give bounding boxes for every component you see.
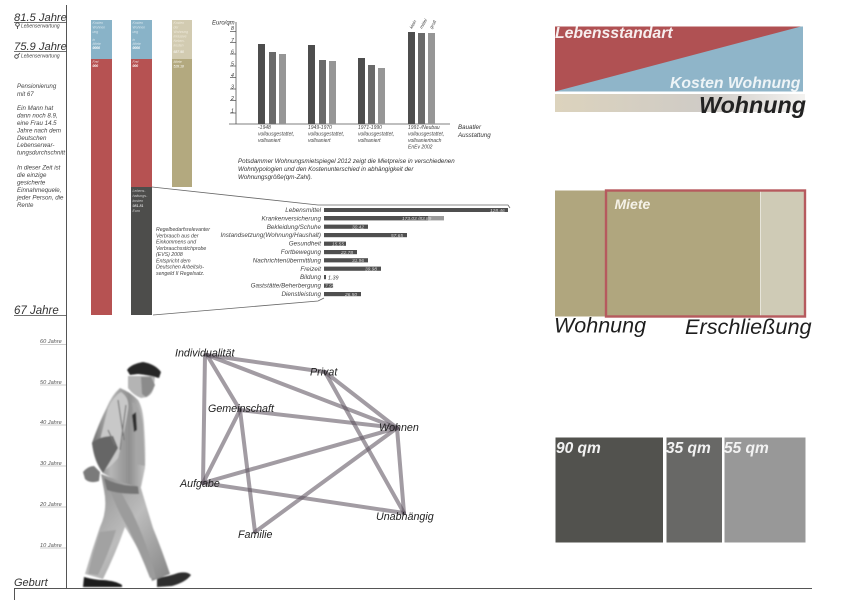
income bar 2: in [132, 38, 135, 42]
rent bar chart: 4 [231, 73, 234, 79]
age scale: 50 Jahre [40, 380, 62, 386]
life expectancy labels: Lebenserwartung [21, 24, 60, 30]
spending bars: Lebensmittel [285, 207, 322, 214]
income bar 2: Lebens- [132, 189, 146, 193]
standard rate text: (EVS) 2008 [156, 252, 183, 258]
income bar 1: 000 [92, 64, 98, 68]
spending bars: Bildung [300, 274, 321, 281]
spending bars: 7.95 [325, 284, 335, 290]
network edges [203, 355, 404, 532]
network labels: Unabhängig [376, 511, 434, 523]
panel: Miete: Miete [614, 196, 650, 212]
rent bar chart: 1971-1990 [358, 125, 382, 131]
rent bar chart: vollsaniert [258, 138, 281, 144]
spending bars: 1.39 [328, 276, 338, 282]
panel: apartment sizes [556, 438, 806, 542]
panel: Lebensstandart vs housing cost: Wohnung [699, 92, 806, 118]
age scale: 20 Jahre [39, 502, 62, 508]
life expectancy labels: 67 Jahre [14, 305, 59, 317]
retirement text: Rente [17, 202, 34, 209]
income bar 2: kosten [132, 199, 143, 203]
rent bar chart: Bauatler [458, 124, 482, 131]
front shoe [157, 572, 191, 587]
income bar 2 [131, 20, 152, 315]
panel: Miete: Wohnung [554, 314, 646, 338]
rent bar chart: vollausgestattet, [258, 132, 294, 138]
spending bars: 15.55 [332, 242, 344, 248]
birth label: Geburt [14, 577, 49, 589]
spending bars [221, 207, 508, 298]
standard rate text: sengeld II Regelsatz. [156, 271, 204, 277]
network labels: Wohnen [379, 422, 419, 434]
retirement text: gesicherte [17, 180, 46, 186]
network labels: Familie [238, 529, 272, 541]
spending bars: 57.65 [391, 233, 403, 239]
spending bars: 26.50 [344, 292, 357, 298]
rent bar chart: 1 [231, 108, 234, 114]
standard rate text: Entspricht dem [156, 258, 191, 264]
income bar 3: Kosten [174, 21, 184, 25]
retirement text: jeder Person, die [16, 194, 64, 202]
retirement text: Pensionierung [17, 83, 57, 90]
panel: Miete: Erschließung [685, 314, 812, 339]
panel: Lebensstandart vs housing cost: Lebensstandart [555, 25, 673, 42]
rent bar chart: EnEv 2002 [408, 144, 433, 150]
standard rate text: Deutschen Arbeitslo- [156, 264, 204, 270]
hands [83, 466, 100, 482]
retirement text: dann noch 8.9, [17, 112, 58, 120]
panel: apartment sizes: 35 qm [666, 440, 711, 457]
standard rate text: Regelbedarfsrelevanter [156, 227, 210, 233]
spending bars: Instandsetzung(Wohnung/Haushalt) [221, 232, 321, 239]
income bar 2: Frei [132, 60, 139, 64]
rent bar chart: 1949-1970 [308, 125, 332, 131]
retirement text: mit 67 [17, 91, 34, 98]
income bar 2: Euro [132, 209, 140, 213]
spending bars: Krankenversicherung [261, 216, 321, 222]
spending bars: Gaststätte/Beherbergung [251, 282, 321, 290]
rent bar chart: mittel [419, 17, 429, 30]
income bar 3: 687.90 [174, 50, 184, 54]
spending bars: 173.03 /83.89 [402, 216, 432, 222]
expansion lines from bar [152, 187, 510, 315]
income bar 3: 528.18 [174, 64, 184, 68]
standard rate text: Verbrauchsstichprobe [156, 246, 206, 252]
age scale [39, 339, 66, 549]
panel: Miete [554, 190, 812, 339]
income bar 1 [91, 20, 112, 315]
network diagram [175, 348, 434, 541]
income bar 1: Kosten [92, 21, 103, 25]
income bar 1: in [92, 38, 95, 42]
income bar 3: Miete [174, 60, 182, 64]
rent bar chart: vollsaniert [358, 138, 381, 144]
rent bar chart: vollausgestattet, [358, 132, 394, 138]
panel: Lebensstandart vs housing cost [555, 25, 806, 118]
photo: walking old man [83, 362, 191, 587]
income bar 1: Frei [92, 60, 99, 64]
spending bars: Nachrichtenübermittlung [253, 258, 321, 264]
rent bar chart: 8 [231, 26, 234, 32]
standard rate text: Verbrauch aus der [156, 234, 199, 240]
rent bar chart: Ausstattung [457, 132, 491, 139]
spending bars: Fortbewegung [281, 249, 321, 256]
rent bar chart: groß [429, 19, 438, 30]
income bar 1: ung [92, 30, 98, 34]
spending bars: 30.42 [352, 225, 364, 231]
rent bar chart: vollsaniertnach [408, 138, 442, 144]
spending bars: 128.46 [490, 208, 505, 214]
income bar 1: 0000 [92, 46, 100, 50]
age scale: 60 Jahre [40, 339, 62, 345]
standard rate text: Einkommens und [156, 240, 197, 246]
life expectancy labels: 75.9 Jahre [14, 41, 67, 53]
network labels: Individualität [175, 348, 235, 360]
life expectancy labels: Lebenserwartung [21, 54, 60, 60]
age scale: 30 Jahre [40, 461, 62, 467]
spending bars: 22.78 [340, 250, 353, 256]
spending bars: Bekleidung/Schuhe [267, 224, 321, 231]
age scale: 10 Jahre [40, 543, 62, 549]
income bar 2: 000 [132, 64, 138, 68]
network labels: Gemeinschaft [208, 403, 275, 415]
network labels: Aufgabe [179, 478, 220, 490]
income bar 3: inklusive [174, 34, 187, 38]
spending bars: 39.98 [365, 266, 377, 272]
rent bar chart: klein [409, 19, 418, 30]
rent bar chart: 2 [230, 96, 234, 102]
rent bar chart: 1991-/Neubau [408, 125, 440, 131]
rent bar chart: 7 [231, 38, 235, 44]
rent bar chart: Euro/qm [212, 20, 235, 26]
income bar 3: Neben- [174, 39, 185, 43]
retirement text: tungsdurchschnitt [17, 150, 65, 156]
age scale: 40 Jahre [40, 420, 62, 426]
retirement text: Einnahmequele, [17, 187, 61, 194]
retirement text: eine Frau 14.5 [17, 120, 57, 127]
rent bar chart: 3 [231, 84, 234, 90]
standard rate text [156, 227, 210, 277]
income bar 2: 0000 [132, 46, 140, 50]
retirement text: Ein Mann hat [17, 105, 53, 112]
panel: apartment sizes: 55 qm [724, 440, 769, 457]
retirement text: In dieser Zeit ist [17, 164, 61, 172]
spending bars: 31.96 [352, 258, 364, 264]
income bar 3: der [174, 26, 179, 30]
retirement text: Jahre nach dem [16, 128, 61, 134]
panel: Lebensstandart vs housing cost: Kosten Wohnung [670, 75, 801, 92]
income bar 3: Wohnung [174, 30, 188, 34]
chart caption: Potsdammer Wohnungsmietspiegel 2012 zeigt die Mietpreise in verschiedenen [238, 158, 455, 165]
chart caption: Wohntypologien und den Kostenunterschied in abhängigkeit der [238, 166, 414, 173]
income bar 1: Miete [92, 42, 101, 46]
spending bars: Freizeit [300, 266, 321, 273]
rent bar chart: vollsaniert [308, 138, 331, 144]
retirement text: Deutschen [17, 135, 47, 142]
beret [127, 362, 161, 378]
life expectancy labels [14, 12, 67, 317]
rent bar chart: -1948 [258, 125, 271, 131]
income bar 2: Kosten [132, 21, 143, 25]
life expectancy labels: 81.5 Jahre [14, 12, 67, 24]
retirement text: die einzige [17, 172, 47, 179]
retirement text [16, 83, 65, 209]
income bar 3: kosten [174, 44, 184, 48]
back shoe [83, 577, 122, 587]
jacket [92, 388, 145, 487]
rent bar chart: vollausgestattet, [308, 132, 344, 138]
income bar 2: 981.81 [132, 204, 144, 208]
network labels [175, 348, 434, 541]
income bar 2: Wohnen [132, 26, 145, 30]
neck and head [128, 376, 155, 398]
chart caption [238, 158, 455, 181]
y axis [229, 22, 450, 124]
rent bar chart: 5 [231, 62, 234, 68]
rent bar chart: 6 [231, 50, 234, 56]
income bar 1: Wohnen [92, 26, 105, 30]
spending bars: Gesundheit [289, 240, 321, 248]
spending bars: Dienstleistung [281, 291, 321, 298]
rent bar chart [212, 17, 491, 150]
panel: apartment sizes: 90 qm [556, 440, 601, 457]
income bar 3 [172, 20, 192, 187]
retirement text: Lebenserwar- [17, 142, 54, 149]
income bar 2: ung [132, 30, 138, 34]
trousers [85, 474, 170, 581]
income bar 2: haltungs- [132, 194, 148, 198]
chart caption: Wohnungsgröße(qm-Zahl). [238, 174, 312, 181]
rent bar chart: vollausgestattet, [408, 132, 444, 138]
income bar 2: Miete [132, 42, 141, 46]
network labels: Privat [310, 366, 338, 378]
